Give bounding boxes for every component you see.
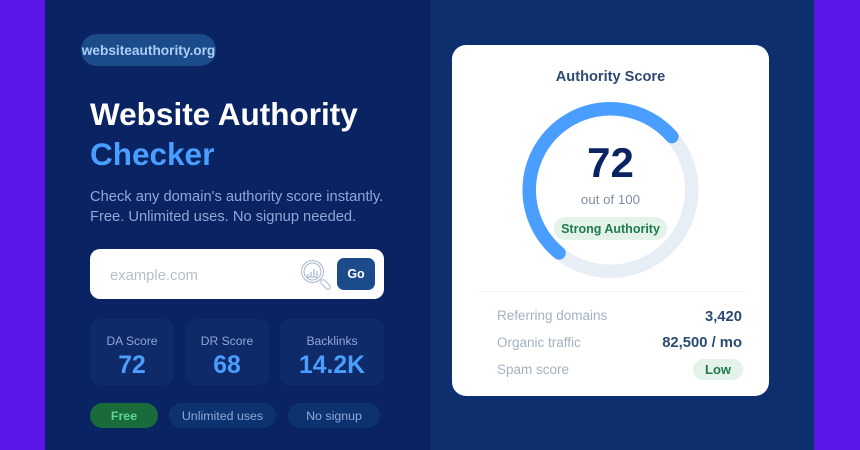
- panel: left: [45, 0, 430, 450]
- strong authority badge: Strong Authority: [561, 222, 660, 236]
- low badge: [693, 359, 743, 380]
- metric: referring domains: Referring domains: [497, 308, 607, 323]
- low badge: Low: [705, 362, 731, 377]
- stat: DR Score: DR Score: [201, 334, 253, 348]
- tag: Unlimited uses: [169, 403, 276, 428]
- gauge caption: out of 100: [581, 192, 640, 207]
- stat: Backlinks: [280, 319, 384, 385]
- gauge ring: [522, 102, 698, 278]
- go button: Go: [347, 266, 365, 280]
- metric: spam score: Spam score: [497, 362, 569, 377]
- card heading: Authority Score: [556, 69, 665, 85]
- tag: Free: Free: [111, 408, 137, 422]
- go button: [337, 258, 375, 290]
- tag: No signup: No signup: [306, 408, 362, 422]
- stat: DA Score: 72: [118, 352, 146, 379]
- title: Checker: [90, 136, 214, 172]
- description: Check any domain's authority score instantly.: [90, 189, 383, 205]
- description: [90, 189, 383, 225]
- panel: score card: [452, 45, 769, 396]
- strong authority badge: [554, 217, 667, 240]
- stat: DA Score: [90, 319, 174, 385]
- title: [90, 96, 358, 172]
- tag: Free: [90, 403, 158, 428]
- icon: magnifier with chart: [301, 260, 331, 290]
- metric value: organic traffic: 82,500 / mo: [662, 335, 742, 351]
- stat: Backlinks: Backlinks: [306, 334, 358, 348]
- input placeholder: example.com: [110, 268, 198, 284]
- gauge value: 72: [587, 139, 634, 186]
- tag: No signup: [288, 403, 380, 428]
- divider: [476, 291, 745, 292]
- metric: organic traffic: Organic traffic: [497, 335, 581, 350]
- domain badge: websiteauthority.org: [82, 42, 215, 58]
- stat: DR Score: 68: [213, 352, 241, 379]
- stat: DR Score: [185, 319, 269, 385]
- search box: [90, 249, 384, 299]
- tag: Unlimited uses: Unlimited uses: [182, 408, 263, 422]
- stat: DA Score: DA Score: [106, 334, 158, 348]
- title: Website Authority: [90, 96, 358, 132]
- panel: right: [430, 0, 814, 450]
- metric value: referring domains: 3,420: [705, 309, 742, 325]
- description: Free. Unlimited uses. No signup needed.: [90, 209, 356, 225]
- domain badge: [81, 34, 216, 66]
- stat: Backlinks: 14.2K: [299, 352, 365, 379]
